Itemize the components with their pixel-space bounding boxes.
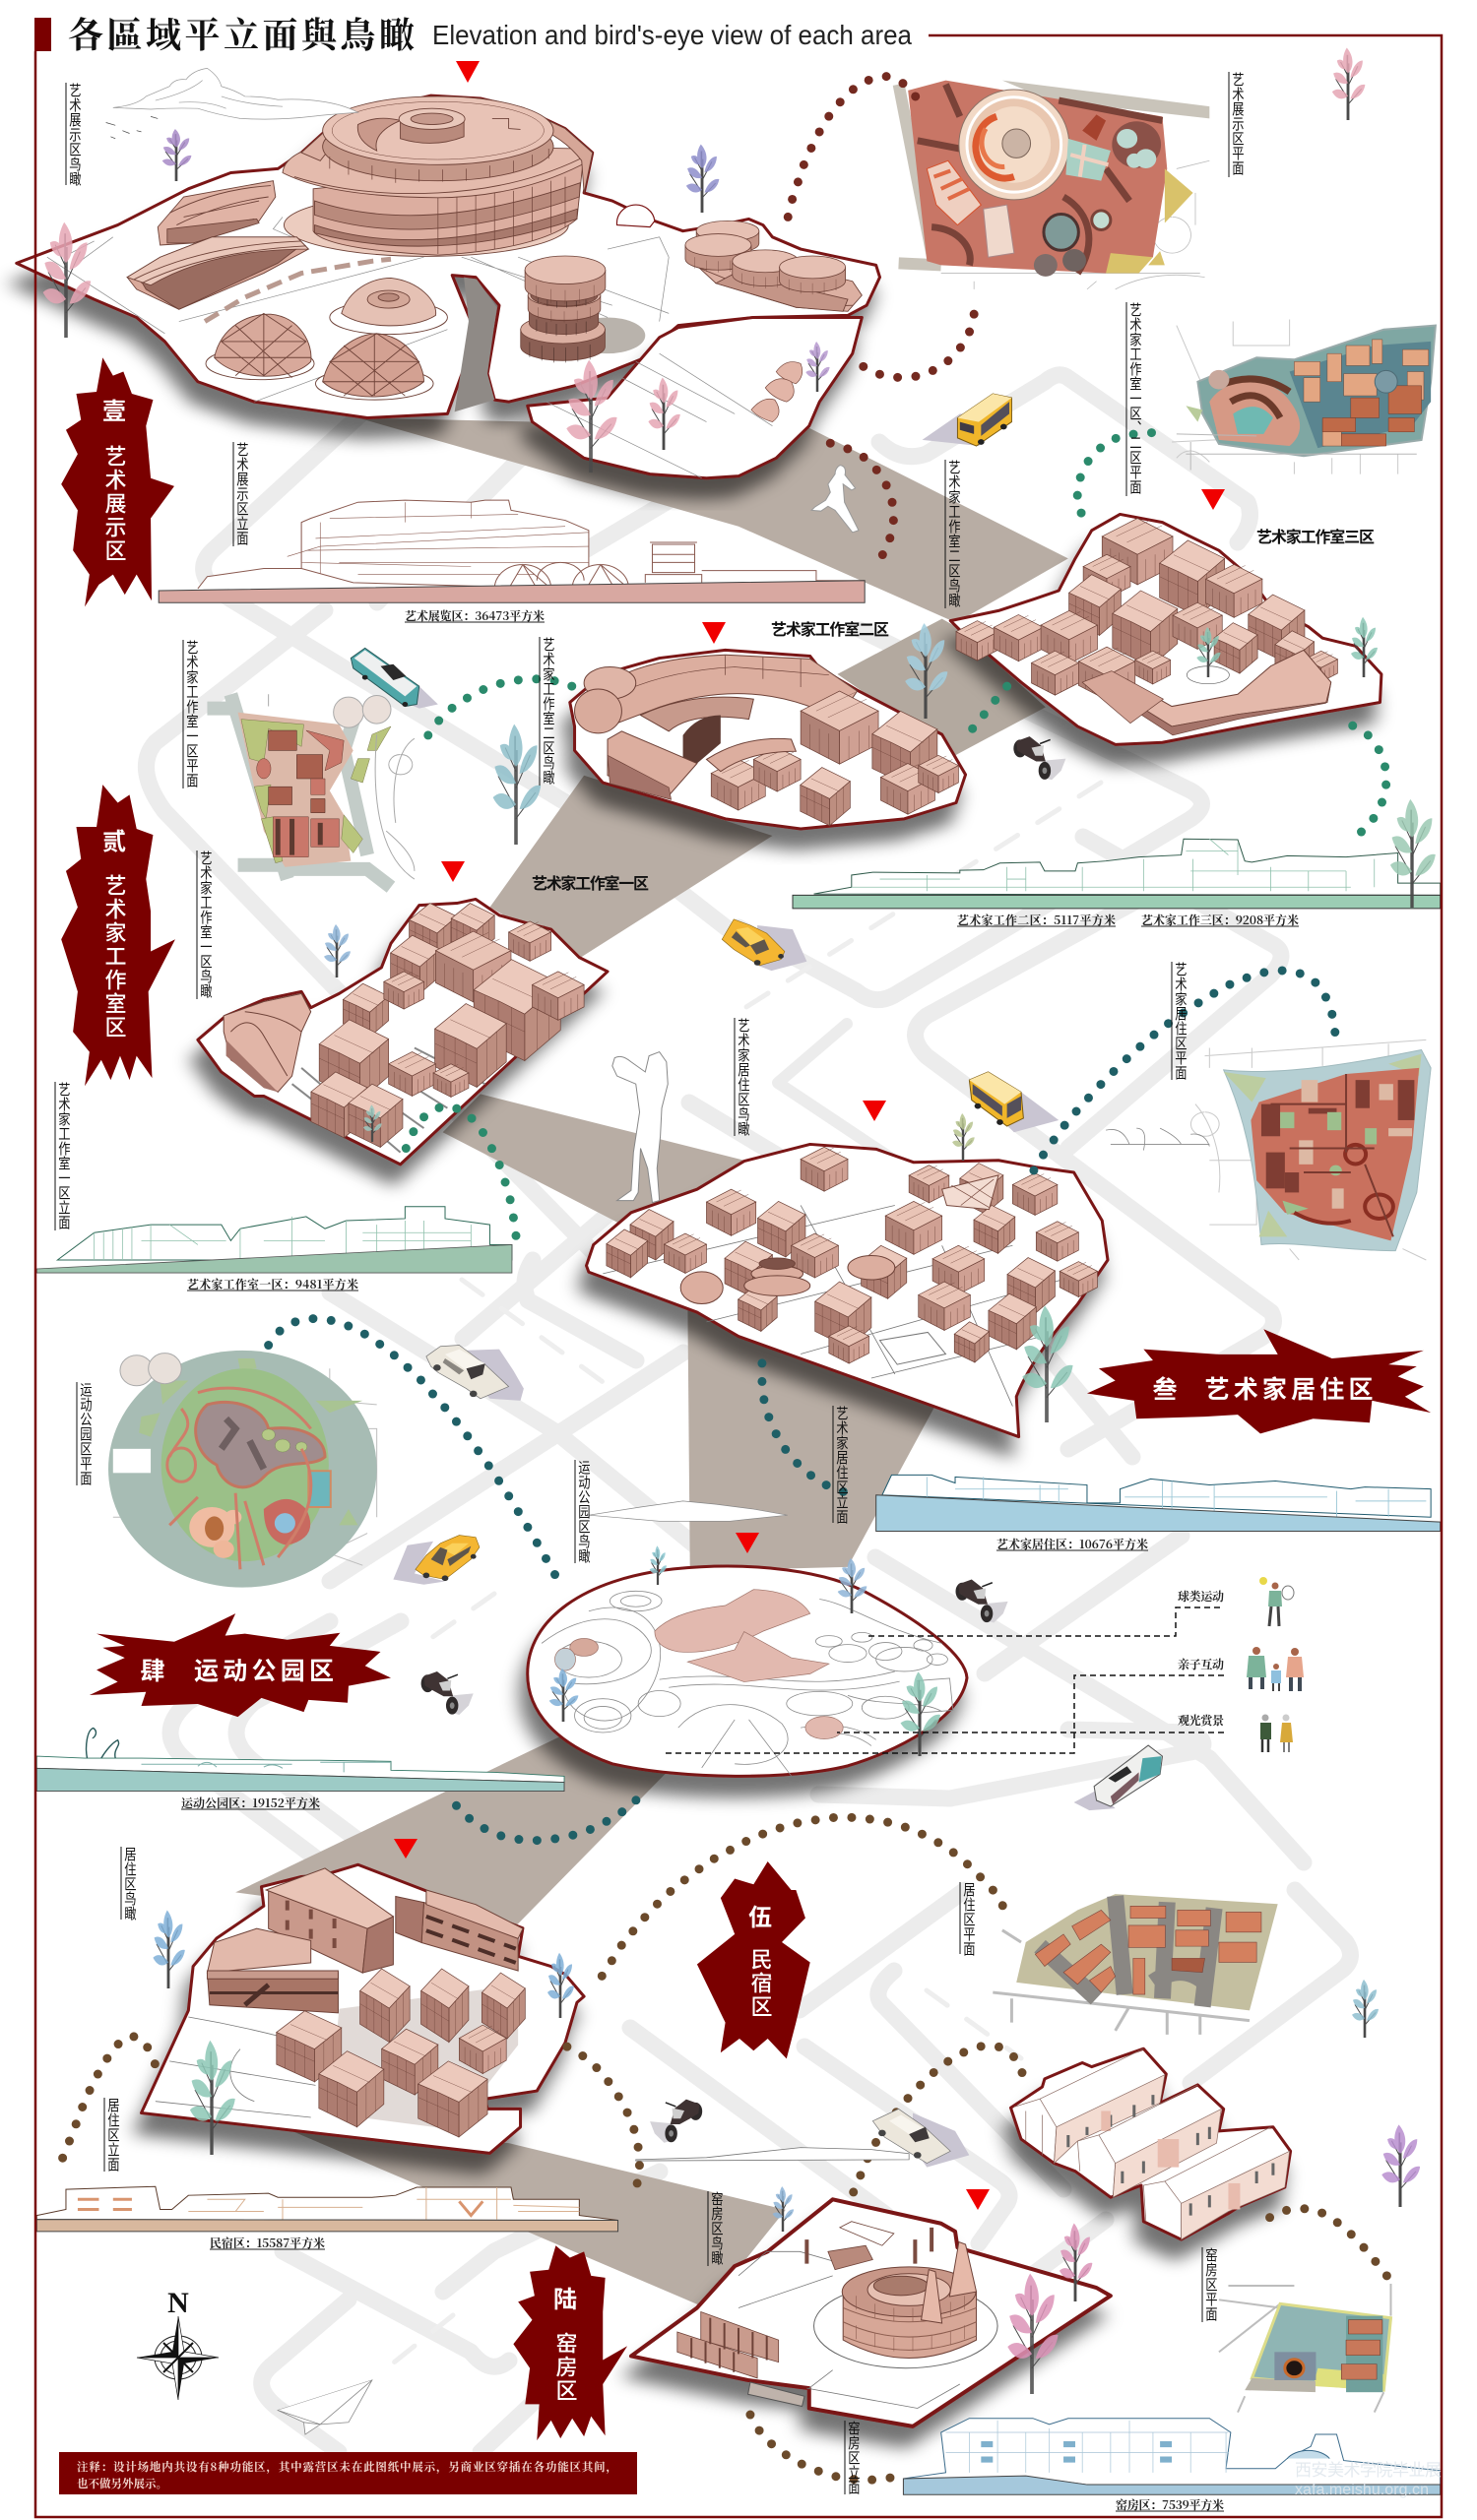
label inn aerial: 居住区鸟瞰: [122, 1847, 137, 1921]
banner text three: 叁: [1152, 1375, 1178, 1404]
banner shape two: [61, 785, 175, 1086]
icon: taxi lower: [393, 1536, 480, 1585]
label park aerial: 运动公园区鸟瞰: [576, 1460, 591, 1563]
area captions: [181, 607, 1299, 2513]
plan: inn: [993, 1894, 1278, 2035]
studio two aerial: [570, 650, 966, 829]
dashed leader lines: [665, 1607, 1224, 1753]
house one: [1014, 2048, 1165, 2164]
tree green far right: [1390, 799, 1436, 908]
right cluster: [685, 220, 862, 311]
icon: motorcycle one: [1013, 736, 1065, 780]
cap domes: [751, 362, 803, 422]
beam: residence to sports park: [687, 1301, 934, 1571]
banner text two: 贰: [102, 828, 126, 855]
tree blue kiln: [773, 2186, 794, 2232]
banner text five: 民宿区: [748, 1948, 772, 2019]
tower: [521, 256, 645, 362]
icon: white car lower: [872, 2109, 969, 2168]
label residence elevation: 艺术家居住区立面: [834, 1406, 849, 1524]
site paths: [47, 217, 772, 478]
figure: runner: [811, 466, 859, 533]
elevation: inn: [36, 2186, 618, 2232]
paving lines: [738, 2251, 960, 2409]
tree pink left: [43, 222, 91, 338]
bold block name studio three: 艺术家工作室三区: [1256, 528, 1375, 546]
icon: bus lower: [1074, 1745, 1162, 1810]
star banners: [61, 357, 1431, 2440]
plan: studio two three: [1172, 319, 1436, 474]
clouds and horizon lines: [589, 1501, 788, 1521]
elevation: studios two and three: [793, 839, 1441, 909]
site outline: [587, 1144, 1108, 1437]
compass N: N: [167, 2287, 189, 2319]
caption exhibition area: 艺术展览区：36473平方米: [405, 607, 545, 624]
label kiln elevation: 窑房区立面: [846, 2420, 861, 2494]
plan: studio one: [207, 694, 415, 887]
tree olive: [952, 1113, 975, 1161]
caption studio two area: 艺术家工作二区：5117平方米: [957, 912, 1116, 928]
background road network: [146, 375, 1350, 2452]
three dormitory buildings: [1010, 2048, 1291, 2239]
curved hall: [224, 993, 311, 1092]
tree pink kiln: [1007, 2274, 1059, 2394]
front wing: [608, 731, 697, 795]
tree blue small: [324, 924, 351, 977]
banner text four: 肆: [140, 1658, 165, 1685]
gabled houses: [277, 1969, 525, 2137]
marker residence: [863, 1101, 886, 1121]
tree blue by beam: [905, 623, 947, 719]
tree purple far right: [1381, 2124, 1420, 2207]
banner text six: 陆: [553, 2287, 577, 2313]
triangular frame: [942, 1175, 998, 1210]
site outline lower right: [528, 317, 862, 478]
bold block name studio one: 艺术家工作室一区: [532, 874, 649, 893]
beam: sports park to inn: [235, 1734, 683, 1928]
header bar: [34, 18, 51, 51]
figure: tennis player: [1259, 1577, 1294, 1626]
label studio two aerial: 艺术家工作室二区鸟瞰: [541, 637, 555, 785]
site outline: [141, 1864, 584, 2153]
houses: [956, 519, 1337, 700]
tree green residence: [1022, 1306, 1073, 1422]
site outline: [528, 1566, 967, 1776]
caption residence area: 艺术家居住区：10676平方米: [996, 1536, 1148, 1552]
dotted arcs brown: [63, 1817, 1389, 2480]
icon: white car: [426, 1346, 524, 1401]
note line one: 注释：设计场地内共设有8种功能区，其中露营区未在此图纸中展示，另商业区穿插在各功能区其间，: [77, 2459, 617, 2475]
tree purple block: [805, 342, 830, 392]
beam: studio two to studio three: [837, 619, 1046, 755]
tree green on studio three: [1351, 617, 1378, 677]
label inn plan: 居住区平面: [961, 1882, 976, 1956]
label inn elevation: 居住区立面: [105, 2098, 120, 2172]
rotunda: [283, 96, 593, 256]
tree green park: [900, 1671, 940, 1756]
low walls: [205, 259, 391, 322]
elevation ground: [159, 581, 865, 602]
path lines: [542, 1591, 953, 1776]
roof tube: [401, 120, 464, 143]
inn aerial: [141, 1864, 584, 2153]
courtyard rectangle: [880, 1332, 945, 1364]
tree purple: [162, 129, 191, 181]
tree blue studio one: [493, 724, 541, 845]
label sightseeing: 观光赏景: [1178, 1712, 1225, 1729]
tree pink small: [648, 378, 680, 450]
houses: [607, 1147, 1097, 1363]
plan: exhibition: [899, 81, 1209, 289]
roof: [323, 96, 553, 164]
spiral towers: [680, 1255, 895, 1303]
dotted arcs teal: [269, 971, 1335, 1841]
plan: kiln: [1219, 2284, 1390, 2413]
caption park area: 运动公园区：19152平方米: [181, 1795, 320, 1811]
icon: motorcycle two: [956, 1579, 1008, 1623]
label exhibition elevation: 艺术展示区立面: [234, 442, 249, 545]
elevation: residence: [876, 1475, 1441, 1531]
tree green inn: [190, 2041, 235, 2155]
watermark: [1295, 2461, 1442, 2498]
tree blue park left: [549, 1669, 578, 1722]
banner shape five: [697, 1861, 810, 2058]
stair hall: [207, 1928, 338, 2013]
watermark url: xafa.meishu.org.cn: [1295, 2482, 1429, 2498]
elevation: sports park: [36, 1728, 564, 1792]
banner text four: 运动公园区: [194, 1658, 334, 1685]
glazing tier: [323, 112, 553, 181]
tree blue far right: [1352, 1980, 1379, 2038]
marker kiln: [966, 2189, 990, 2210]
wave buildings: [127, 181, 308, 309]
vertical labels: [55, 72, 1245, 2494]
label residence plan: 艺术家居住区平面: [1173, 962, 1188, 1080]
label studio one plan: 艺术家工作室一区平面: [184, 640, 199, 788]
banner shape four: [90, 1613, 391, 1717]
shadow floor: [330, 1984, 518, 2129]
dotted arcs red-brown: [788, 77, 974, 555]
icon: yellow bus top: [923, 394, 1011, 446]
bold block name studio two: 艺术家工作室二区: [771, 620, 889, 639]
banner text six: [553, 2287, 577, 2403]
title english: Elevation and bird's-eye view of each area: [432, 20, 912, 50]
base disc: [284, 194, 568, 256]
label studio plan one two: 艺术家工作室一区、二区平面: [1127, 302, 1142, 494]
terrace block: [396, 1890, 523, 1971]
label exhibition aerial: 艺术展示区鸟瞰: [67, 83, 82, 186]
caption studio one area: 艺术家工作室一区：9481平方米: [187, 1276, 358, 1292]
banner text one: 艺术展示区: [102, 445, 126, 563]
label kiln aerial: 窑房区鸟瞰: [709, 2190, 724, 2265]
tree blue-purple: [686, 145, 719, 213]
label park plan: 运动公园区平面: [78, 1382, 93, 1485]
figure: person photographing: [612, 1052, 668, 1203]
crosswalk lines: [292, 1047, 485, 1153]
sketch cloud and birds: [106, 68, 358, 139]
marker park: [736, 1533, 759, 1553]
tree blue inn right: [547, 1953, 574, 2018]
beam: exhibition to studio three: [358, 417, 1068, 623]
caption studio three area: 艺术家工作三区：9208平方米: [1141, 912, 1299, 928]
houses: [711, 691, 958, 826]
ramp: [748, 2382, 804, 2406]
red markers: [394, 61, 1225, 2210]
banner text two: 艺术家工作室区: [102, 874, 126, 1040]
house two: [1077, 2085, 1221, 2197]
pink lawn blobs: [554, 1590, 843, 1739]
site outline: [198, 899, 608, 1165]
elevation: exhibition: [159, 500, 865, 602]
tree pink lower: [566, 360, 617, 472]
body: [313, 160, 583, 255]
marker inn: [394, 1839, 417, 1858]
long block: [266, 1868, 393, 1973]
site outline: [631, 2199, 1111, 2426]
label ball sports: 球类运动: [1178, 1588, 1224, 1605]
outer slab: [283, 145, 587, 198]
marker exhibition: [456, 61, 480, 83]
label kiln plan: 窑房区平面: [1203, 2246, 1218, 2321]
site outline: [950, 514, 1381, 744]
activity callouts: [665, 1588, 1225, 1753]
plan: residence: [1190, 1040, 1431, 1260]
beam: studio one to residence: [443, 1094, 744, 1229]
tree green small site: [363, 1104, 382, 1142]
banner text one: 壹: [102, 399, 126, 425]
street lines: [603, 1205, 1083, 1407]
geodesic domes: [206, 278, 447, 400]
banner shape three: [1087, 1329, 1431, 1433]
label studio one aerial: 艺术家工作室一区鸟瞰: [198, 850, 213, 998]
residence aerial: [587, 1144, 1108, 1437]
icon: paper plane: [278, 2380, 372, 2434]
channel: [455, 278, 497, 411]
label studio two aerial top: 艺术家工作室二区鸟瞰: [946, 460, 961, 607]
note line two: 也不做另外展示。: [77, 2476, 167, 2491]
banner text five: [748, 1905, 772, 2019]
tree blue inn left: [153, 1910, 185, 1988]
icon: teal bus: [351, 648, 438, 709]
frame pavilion: [806, 2222, 931, 2270]
icon: bird sketches: [1106, 1128, 1209, 1151]
elevation: studio one: [36, 1207, 512, 1273]
house three: [1143, 2127, 1290, 2239]
label family: 亲子互动: [1178, 1656, 1224, 1672]
sports park aerial: [528, 1566, 967, 1776]
L-shaped building: [1120, 650, 1331, 726]
stair blocks: [677, 2312, 779, 2378]
figure: family: [1247, 1647, 1304, 1691]
kiln aerial: [631, 2199, 1111, 2426]
tree green plaza: [1196, 627, 1221, 677]
beam: inn to kiln: [292, 2131, 786, 2308]
houses: [311, 904, 584, 1148]
tree pink top right: [1332, 48, 1365, 120]
icon: motorcycle four: [650, 2100, 702, 2143]
banner text six: 窑房区: [553, 2332, 577, 2403]
horizon sketch: [636, 2148, 909, 2161]
watermark: 西安美术学院毕业展: [1295, 2461, 1442, 2480]
studio one aerial: [198, 899, 608, 1165]
outer ring: [431, 96, 593, 193]
tree pink kiln upper: [1060, 2223, 1092, 2301]
kiln body: [842, 2242, 977, 2361]
site outline: [570, 650, 966, 829]
elevation: kiln: [903, 2419, 1441, 2494]
figures: activity people: [1247, 1577, 1304, 1752]
exhibition aerial block: [17, 95, 880, 478]
caption kiln area: 窑房区：7539平方米: [1116, 2496, 1224, 2513]
chimneys: [922, 2270, 942, 2323]
label exhibition plan: 艺术展示区平面: [1230, 72, 1245, 175]
tree cyan park top: [650, 1545, 667, 1585]
beam: studio one to studio two: [489, 776, 772, 958]
ring range: [577, 655, 858, 724]
caption inn area: 民宿区：15587平方米: [210, 2235, 325, 2251]
note box: [59, 2452, 637, 2494]
icon: yellow taxi: [722, 919, 806, 971]
marker studio two: [702, 622, 726, 644]
banner text five: 伍: [748, 1905, 772, 1931]
icon: yellow bus middle: [969, 1072, 1059, 1132]
plan: sports park: [108, 1351, 377, 1588]
marker studio three: [1201, 489, 1225, 510]
title chinese: 各區域平立面與鳥瞰: [68, 8, 415, 58]
banner shape six: [513, 2245, 627, 2440]
site outline main: [17, 95, 880, 417]
studio three aerial: [950, 514, 1381, 744]
tree blue park: [838, 1558, 867, 1613]
banner text three: 艺术家居住区: [1205, 1376, 1373, 1404]
label studio one elevation: 艺术家工作室一区立面: [56, 1082, 71, 1229]
banner shape one: [61, 357, 174, 606]
label residence aerial: 艺术家居住区鸟瞰: [736, 1018, 750, 1136]
icon: motorcycle three: [421, 1671, 474, 1715]
marker studio one: [441, 861, 465, 882]
dotted arcs green: [406, 433, 1386, 1247]
compass rose: [137, 2287, 219, 2400]
figure: elderly couple: [1260, 1715, 1293, 1752]
small white dome: [616, 205, 655, 227]
